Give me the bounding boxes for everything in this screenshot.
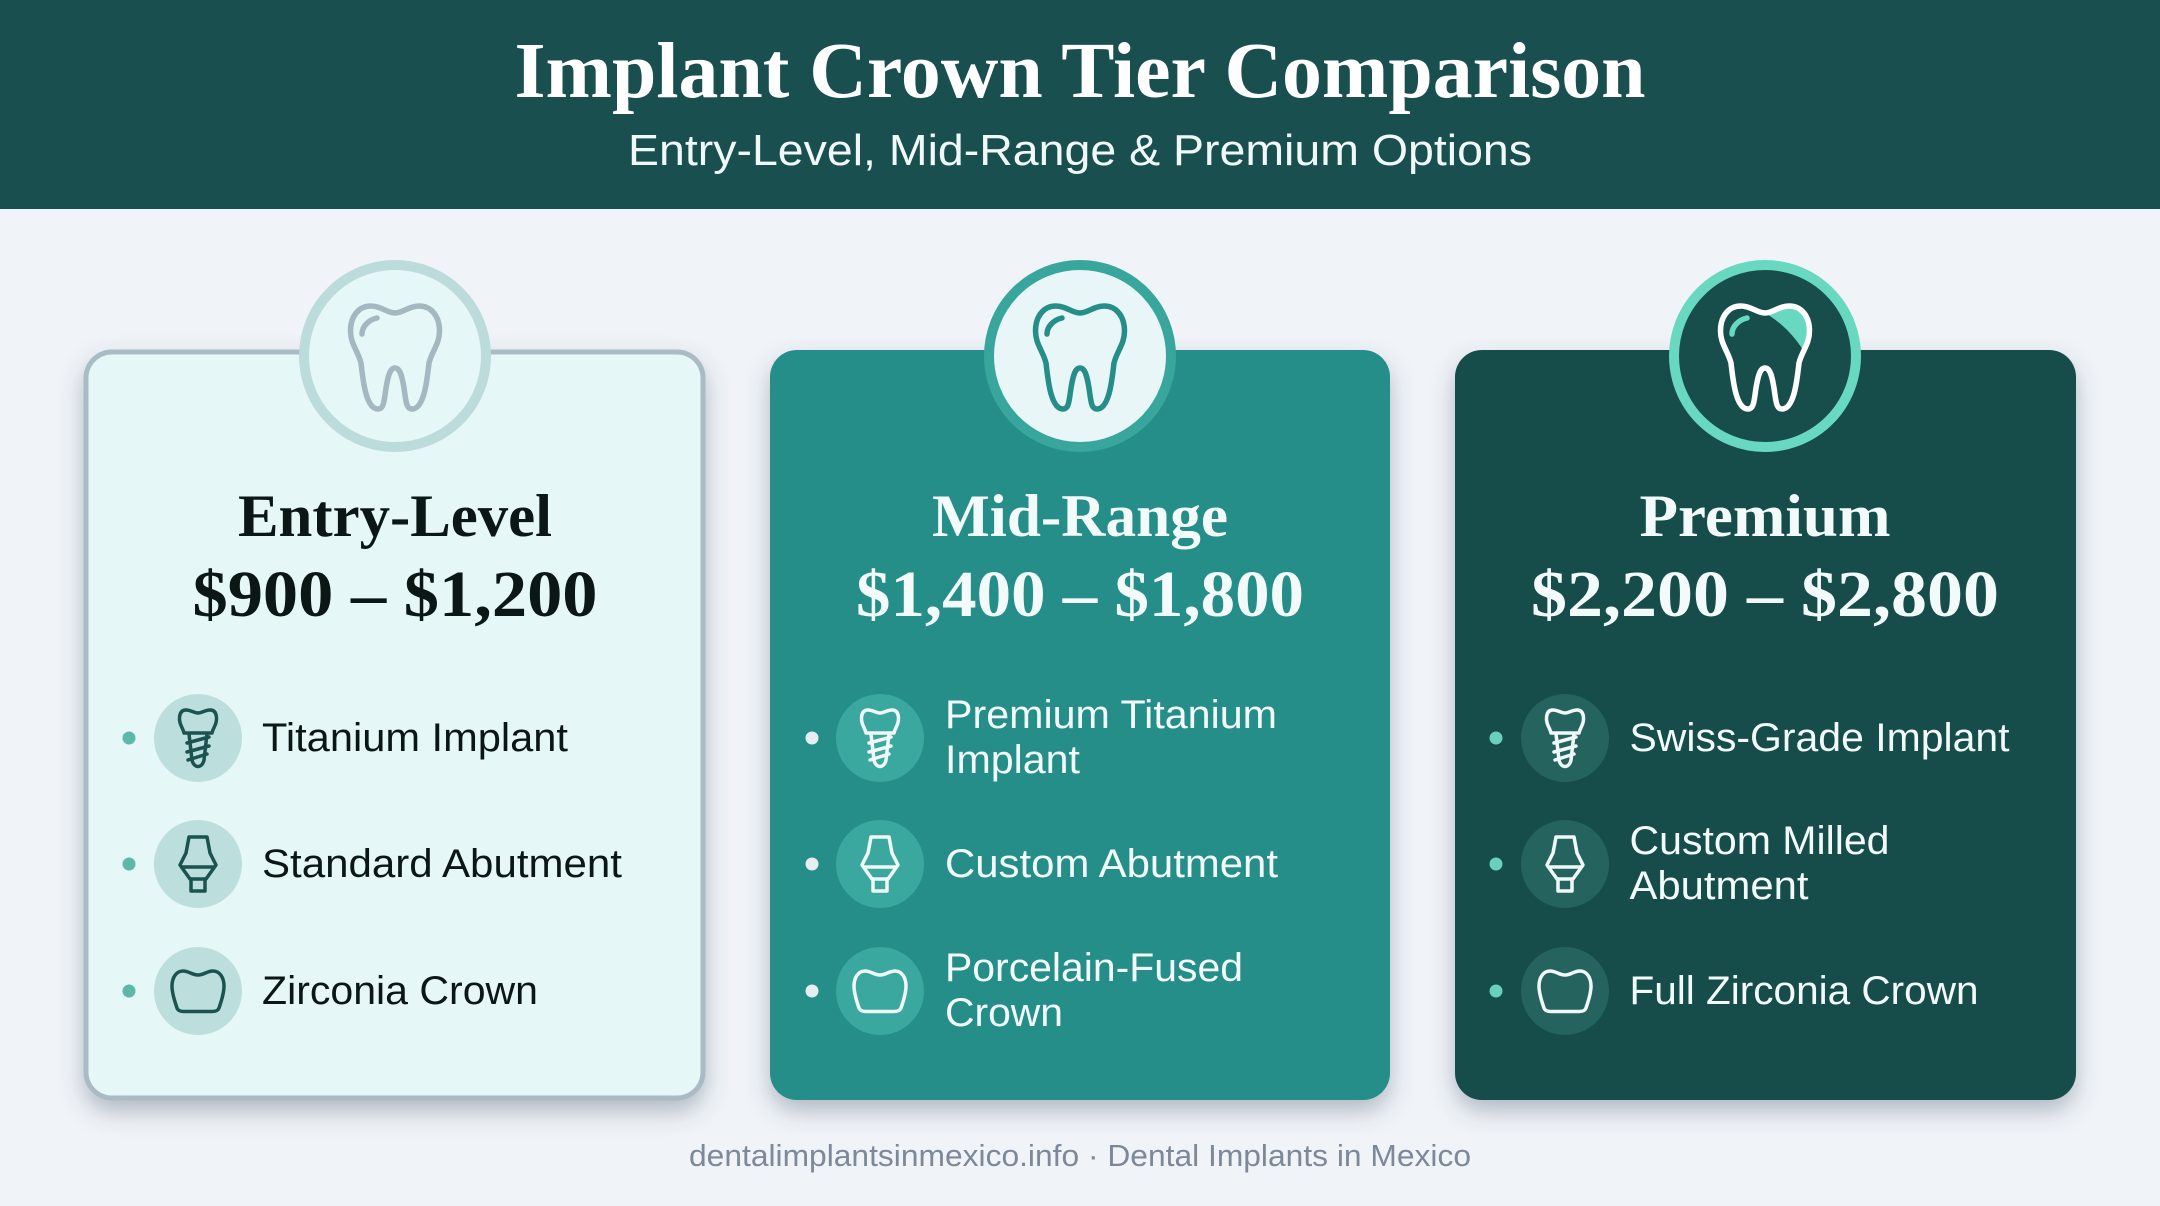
item: custom abutment [806, 820, 1278, 908]
item: titanium implant [122, 694, 568, 782]
mid tier name: Mid-Range [932, 483, 1228, 549]
icon: entry tooth badge [304, 265, 486, 447]
item: standard abutment: Standard Abutment [262, 842, 622, 886]
premium price: $2,200 – $2,800 [1531, 558, 1999, 631]
header banner [0, 0, 2160, 209]
item: porcelain-fused crown: Crown [945, 991, 1063, 1035]
mid price: $1,400 – $1,800 [856, 558, 1304, 631]
item: custom abutment: Custom Abutment [945, 842, 1278, 886]
item: premium titanium implant [806, 693, 1277, 782]
panel: mid-range [770, 265, 1390, 1100]
item: full zirconia crown: Full Zirconia Crown [1630, 969, 1978, 1013]
item: custom milled abutment: Custom Milled [1630, 819, 1890, 863]
panel: entry-level [86, 265, 703, 1098]
premium tier name: Premium [1640, 483, 1890, 549]
item: swiss-grade implant [1490, 694, 2010, 782]
item: zirconia crown [122, 947, 538, 1035]
icon: premium tooth badge [1674, 265, 1856, 447]
panel: premium [1455, 265, 2076, 1100]
item: zirconia crown: Zirconia Crown [262, 969, 538, 1013]
footer credit: dentalimplantsinmexico.info · Dental Implants in Mexico [689, 1138, 1471, 1173]
item: porcelain-fused crown: Porcelain-Fused [945, 946, 1243, 990]
entry tier name: Entry-Level [238, 483, 552, 549]
item: custom milled abutment: Abutment [1630, 864, 1808, 908]
icon: mid tooth badge [989, 265, 1171, 447]
item: standard abutment [122, 820, 622, 908]
item: swiss-grade implant: Swiss-Grade Implant [1630, 716, 2010, 760]
subtitle: Entry-Level, Mid-Range & Premium Options [628, 126, 1532, 175]
item: full zirconia crown [1490, 947, 1978, 1035]
title: Implant Crown Tier Comparison [514, 28, 1646, 115]
item: premium titanium implant: Implant [945, 738, 1080, 782]
item: premium titanium implant: Premium Titanium [945, 693, 1277, 737]
item: porcelain-fused crown [806, 946, 1243, 1035]
item: custom milled abutment [1490, 819, 1890, 908]
entry price: $900 – $1,200 [192, 558, 598, 631]
item: titanium implant: Titanium Implant [262, 716, 568, 760]
